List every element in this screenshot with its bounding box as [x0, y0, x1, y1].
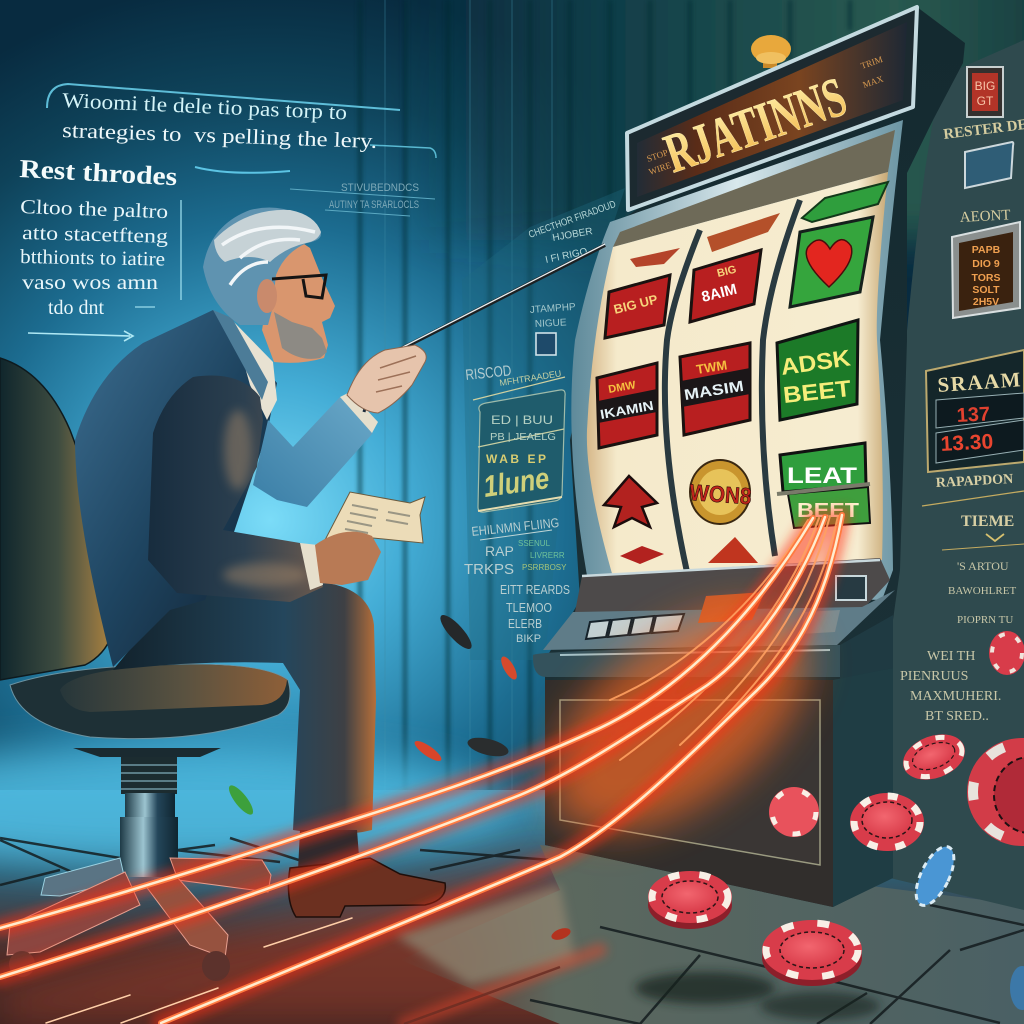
symbol: leat beet: [777, 443, 870, 528]
marquee: [627, 7, 917, 210]
thin sparks: [46, 918, 352, 1023]
lower cabinet: [545, 668, 893, 907]
blue button: [965, 142, 1013, 188]
blue chip: [908, 841, 962, 911]
symbol: leat beet: BEET: [797, 500, 859, 522]
symbol: 2-top: BIG: [716, 264, 738, 280]
open paper book: [325, 492, 425, 543]
reel hood: [613, 130, 895, 247]
left wall lower text: TLEMOO: [506, 600, 552, 615]
left wall labels: RISCOD: [465, 362, 512, 384]
soft red trail: [404, 950, 600, 1024]
led display: PAPB: [972, 244, 1001, 256]
chair: [0, 358, 290, 981]
left wall lower text: EITT REARDS: [500, 582, 570, 597]
left wall labels: MFHTRAADEU: [499, 368, 562, 388]
subheading: Rest throdes: [19, 154, 178, 191]
right wall fine print: BT SRED..: [925, 709, 989, 724]
flying dark chip: [436, 611, 476, 653]
glasses: [272, 275, 326, 298]
symbol: adsk beet: [777, 320, 858, 420]
silver hair: [214, 210, 321, 262]
streak glow: [0, 515, 842, 1023]
pointing hand: [347, 345, 426, 413]
left wall lower text: EHILNMN FLIING: [471, 515, 560, 539]
reel dividers: [665, 200, 800, 572]
symbol: coin: [689, 460, 753, 524]
left wall lower text: RAP: [485, 543, 514, 559]
left wall labels: [465, 199, 617, 400]
lower hand: [315, 532, 381, 585]
symbol: heart card: [790, 217, 873, 307]
wood floor: [0, 745, 1024, 1024]
side text block: btthionts to iatire: [20, 246, 165, 271]
right wall fine print: 'S ARTOU: [957, 559, 1009, 573]
small wall caption: [290, 182, 435, 216]
legs: [113, 583, 376, 834]
chair back: [0, 358, 116, 680]
alert lamp: [967, 67, 1003, 117]
machine glow: [513, 565, 847, 875]
right wall fine print: BAWOHLRET: [948, 585, 1016, 597]
symbol: coin: WON8: [689, 479, 753, 509]
right wall lower text: [922, 472, 1024, 550]
left wall labels: JTAMPHP: [529, 302, 576, 316]
score panel: SRAAM: [937, 367, 1023, 397]
lower cuff: [300, 543, 323, 590]
side text block: vaso wos amn: [22, 272, 158, 294]
slot machine: [533, 7, 965, 907]
right wall fine print: PIOPRN TU: [957, 614, 1013, 626]
label: aeont: AEONT: [959, 207, 1011, 226]
flying red chip: [412, 738, 444, 764]
marquee: MAX: [861, 73, 885, 90]
symbol: 1-middle: [597, 363, 657, 448]
led display: [952, 222, 1020, 318]
marquee: STOP: [645, 147, 669, 164]
left wall labels: I FI RIGO: [544, 246, 589, 266]
side text block: atto stacetfteng: [22, 222, 168, 248]
side text block: Cltoo the paltro: [20, 196, 169, 223]
left wall labels: HJOBER: [552, 226, 593, 244]
left wall labels: CHECTHOR FIRADOUD: [527, 199, 617, 241]
reel 3 symbols: [777, 182, 888, 528]
right wall fine print: MAXMUHERI.: [910, 689, 1001, 704]
hair: [203, 208, 321, 325]
chip: [762, 920, 862, 986]
arrow: [28, 331, 133, 341]
reel 2 symbols: [680, 213, 780, 563]
headline panel: [47, 84, 436, 173]
panel: right wall: [890, 40, 1024, 910]
left wall lower text: LIVRERR: [530, 551, 565, 560]
symbol: small diamond: [620, 546, 664, 564]
poker chips: [225, 611, 1024, 1010]
symbol: 2-middle: TWM: [695, 357, 728, 377]
upper wall shade: [400, 0, 1024, 240]
right wall fine print: WEI TH: [927, 649, 975, 664]
alert lamp: GT: [977, 94, 994, 108]
chip: [648, 871, 732, 929]
marquee: RJATINNS: [657, 66, 854, 185]
chip: [897, 726, 971, 788]
left wall lower text: [464, 515, 570, 645]
raised arm: [253, 397, 373, 507]
symbol: triangle: [708, 537, 758, 563]
torso jacket: [75, 310, 277, 667]
shirt and collar: [232, 320, 277, 420]
left wall section: [462, 188, 625, 660]
chip: [850, 793, 924, 851]
right wall fine print: [900, 559, 1016, 724]
blue chip: [1010, 966, 1024, 1010]
small wall caption: AUTINY TA SRARLOCLS: [329, 199, 419, 211]
beard: [274, 312, 327, 359]
marquee: WIRE: [647, 160, 673, 177]
left wall panel: WAB EP: [486, 452, 546, 466]
marquee: TRIM: [859, 54, 884, 71]
right wall lower text: TIEME: [961, 513, 1014, 530]
light streaks: [0, 515, 842, 1024]
led display: DIO 9: [972, 258, 1000, 270]
left wall lower text: SSENUL: [518, 539, 551, 548]
large chip: [967, 738, 1024, 846]
symbol: 2-top: 8AIM: [700, 281, 739, 306]
streak core: [0, 515, 842, 1023]
left wall panel: [478, 390, 565, 512]
reel frame: [571, 120, 903, 600]
right wall fine print: PIENRUUS: [900, 669, 968, 684]
small top symbol: [630, 248, 680, 267]
left wall lower text: ELERB: [508, 616, 542, 631]
symbol: 1-top: [605, 275, 670, 338]
chair base: [7, 748, 271, 981]
symbol: leat beet: LEAT: [787, 463, 858, 488]
streak bundle: [610, 516, 838, 800]
score panel: [926, 350, 1024, 472]
symbol: 2-middle: [680, 343, 750, 435]
background wall: [0, 0, 1024, 810]
chip: [769, 787, 819, 837]
wall planks: [360, 0, 850, 800]
neck and face: [262, 240, 335, 363]
left wall panel: ED | BUU: [491, 413, 553, 427]
symbol: 1-middle: IKAMIN: [599, 398, 655, 422]
left wall lower text: PSRRBOSY: [522, 563, 567, 572]
hair highlights: [222, 227, 315, 285]
reel 1 symbols: [597, 248, 680, 564]
small top symbol: [707, 213, 780, 252]
right wall lower text: RAPAPDON: [935, 472, 1014, 491]
lapel: [213, 310, 268, 400]
symbol: adsk beet: ADSK: [779, 344, 852, 380]
man: [75, 208, 605, 917]
symbol: spade arrow: [604, 476, 657, 527]
sleeve highlights: [223, 410, 307, 587]
symbol: 2-top: [690, 250, 761, 322]
left wall panel: 1lune: [481, 462, 551, 504]
symbol: adsk beet: BEET: [782, 375, 852, 408]
reel backdrop: [587, 172, 888, 577]
flying green chip: [225, 782, 257, 818]
top green tag: [802, 182, 888, 222]
chip: [989, 631, 1024, 675]
flying dark chip: [466, 734, 510, 760]
headline panel: strategies to vs pelling the lery.: [62, 118, 377, 153]
left wall lower text: TRKPS: [464, 561, 514, 578]
left wall lower text: BIKP: [516, 633, 541, 645]
ankle: [298, 830, 360, 870]
top knob: [751, 35, 791, 68]
ear: [257, 279, 277, 313]
raised cuff: [340, 392, 378, 433]
small wall caption: STIVUBEDNDCS: [341, 182, 419, 194]
control console: [533, 558, 895, 680]
arm holding book: [148, 376, 323, 602]
left wall labels: NIGUE: [535, 317, 567, 330]
score panel: 137: [956, 403, 991, 427]
small floor chip: [550, 926, 572, 942]
chair seat: [10, 664, 290, 739]
pointer stick: [364, 244, 605, 412]
headline panel: Wioomi tle dele tio pas torp to: [62, 88, 348, 124]
symbol: 2-middle: MASIM: [683, 378, 745, 404]
flying red chip: [498, 654, 520, 682]
led display: 2H5V: [973, 296, 999, 308]
shoe: [288, 858, 445, 917]
alert lamp: BIG: [975, 79, 995, 93]
side text block: [20, 196, 181, 319]
streak body: [0, 515, 842, 1023]
cabinet body: [545, 7, 965, 907]
symbol: 1-middle: DMW: [607, 379, 637, 396]
symbol: 1-top: BIG UP: [612, 291, 659, 317]
led display: SOLT: [972, 284, 1000, 296]
side text block: tdo dnt: [48, 297, 105, 319]
led display: TORS: [972, 272, 1000, 284]
left wall panel: PB | JEAELG: [490, 432, 556, 443]
score panel: 13.30: [940, 430, 994, 456]
